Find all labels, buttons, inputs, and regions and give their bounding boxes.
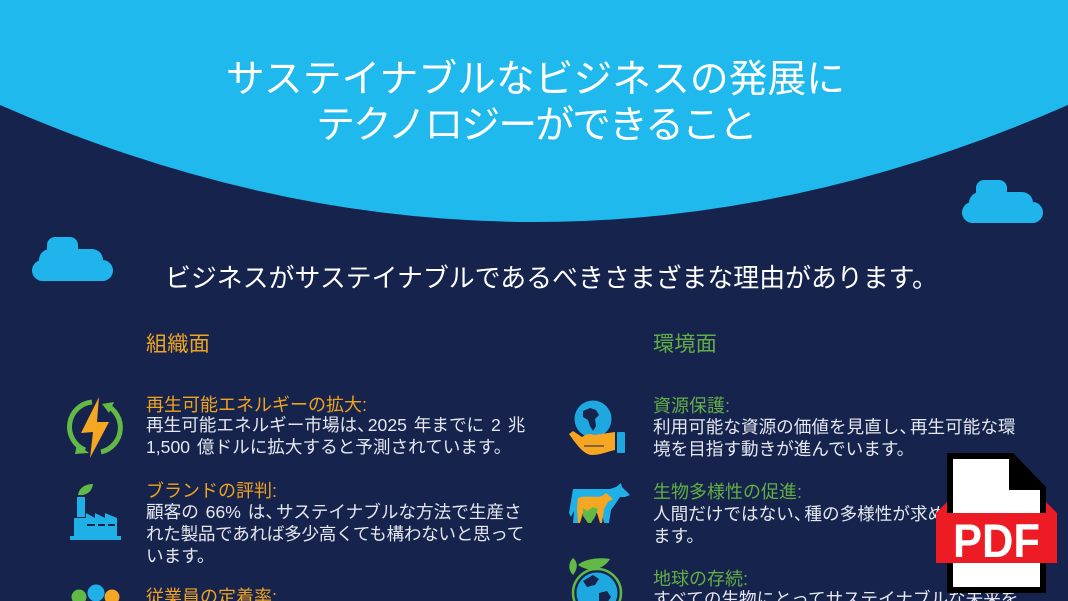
sky header curve: [0, 0, 1068, 222]
icon: earth with leaves: [569, 558, 622, 601]
icon: globe in hand: [569, 400, 625, 455]
text: ます。: [653, 526, 704, 546]
text: 資源保護:: [653, 396, 730, 416]
text: います。: [146, 546, 215, 566]
icon: PDF badge: [936, 453, 1057, 593]
text: 生物多様性の促進:: [653, 482, 802, 502]
heading: organization: 組織面: [146, 332, 210, 356]
text: 再生可能エネルギー市場は、2025 年までに 2 兆: [146, 415, 525, 435]
icon: factory with leaf: [70, 484, 121, 540]
text: 1,500 億ドルに拡大すると予測されています。: [146, 437, 511, 457]
text: 再生可能エネルギーの拡大:: [146, 395, 367, 415]
icon: cloud left: [32, 237, 113, 281]
icon: PDF badge: PDF: [953, 514, 1040, 567]
text: 顧客の 66% は、サステイナブルな方法で生産さ: [146, 502, 522, 522]
heading: environment: 環境面: [653, 332, 717, 356]
icon: renewable energy bolt: [67, 397, 123, 458]
text: 人間だけではない、種の多様性が求められてい: [653, 504, 1015, 524]
title: [226, 58, 845, 147]
title: テクノロジーができること: [316, 104, 756, 147]
text: ブランドの評判:: [146, 481, 277, 501]
text: れた製品であれば多少高くても構わないと思って: [146, 524, 524, 544]
icon: cow and animals: [569, 483, 630, 523]
text: brand reputation: [146, 481, 524, 566]
text: planet survival: [653, 569, 1018, 601]
text: renewable energy: [146, 395, 525, 457]
text: 地球の存続:: [653, 569, 748, 589]
subtitle: ビジネスがサステイナブルであるべきさまざまな理由があります。: [165, 265, 938, 293]
text: resource conservation: [653, 396, 1016, 459]
icon: people: [72, 584, 120, 601]
text: 境を目指す動きが進んでいます。: [653, 439, 914, 459]
text: biodiversity: [653, 482, 1015, 546]
icon: cloud right: [962, 180, 1043, 223]
title: サステイナブルなビジネスの発展に: [226, 58, 845, 101]
text: 利用可能な資源の価値を見直し、再生可能な環: [653, 417, 1016, 437]
